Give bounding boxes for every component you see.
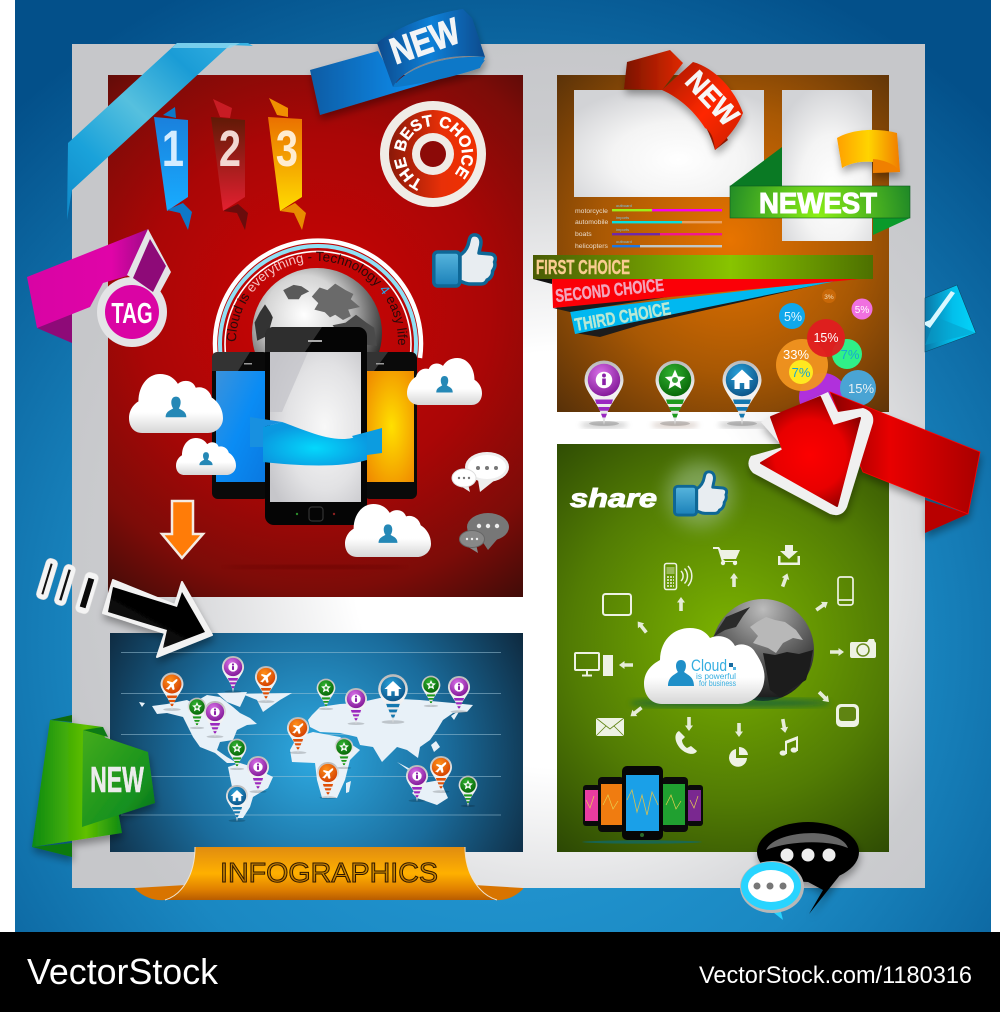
percentage bubbles: 5%	[784, 310, 802, 324]
icon: envelope	[596, 718, 624, 736]
central cloud with text: Cloud	[691, 657, 727, 675]
red arrow sticker	[748, 392, 980, 533]
bar chart	[575, 203, 722, 250]
first choice: FIRST CHOICE	[536, 257, 630, 279]
number ribbon 3	[268, 98, 306, 230]
second choice: SECOND CHOICE	[554, 275, 665, 306]
INFOGRAPHICS banner: INFOGRAPHICS	[220, 857, 438, 888]
orange curl	[837, 130, 900, 173]
percentage bubbles: 15%	[813, 331, 839, 345]
speech bubbles gray	[460, 513, 509, 553]
icon: download	[778, 545, 800, 565]
arrow ribbon	[830, 392, 980, 533]
left phone	[212, 352, 269, 499]
icon: pie chart	[729, 747, 748, 767]
blank paper card left	[574, 90, 764, 197]
right phone	[364, 352, 417, 499]
percentage bubbles	[776, 289, 876, 421]
central cloud with text: for business	[699, 679, 736, 688]
bar chart: boats	[575, 231, 592, 238]
number ribbon 2: 2	[219, 120, 241, 177]
orange down arrow	[162, 501, 203, 558]
green NEW ribbon: NEW	[90, 761, 144, 800]
icon: cart	[713, 547, 740, 565]
blue corner ribbon	[67, 43, 253, 220]
bar chart: imports	[616, 227, 629, 232]
green NEWEST banner: NEWEST	[759, 188, 877, 220]
INFOGRAPHICS banner	[135, 847, 523, 900]
percentage bubbles: 7%	[841, 347, 860, 362]
globe with text ring: Cloud is everything - Technology 4 easy life	[226, 252, 408, 345]
bar chart: outboard	[616, 203, 632, 208]
bar chart: automobile	[575, 219, 608, 226]
black arrow sticker	[103, 580, 212, 657]
green NEW ribbon	[32, 715, 155, 857]
blank paper card right	[782, 90, 872, 241]
thumbs up with glow	[667, 461, 733, 527]
slash marks sticker	[35, 557, 100, 615]
blue NEW ribbon: NEW	[385, 10, 465, 73]
red NEW ribbon: NEW	[679, 64, 746, 133]
thumbs up icon	[434, 235, 495, 286]
panel: red cloud panel	[108, 75, 523, 597]
best choice badge	[380, 101, 486, 207]
number ribbon 2	[211, 99, 248, 230]
map pins	[161, 656, 477, 822]
percentage bubbles: 33%	[783, 347, 809, 362]
footer image id: VectorStock.com/1180316	[699, 962, 972, 989]
percentage bubbles: 7%	[792, 365, 811, 380]
cloud 3	[407, 358, 482, 405]
world map	[139, 692, 473, 818]
central cloud with text	[630, 628, 830, 708]
icon: telephone handset	[675, 731, 697, 754]
pin: star	[651, 360, 699, 428]
footer brand: VectorStock	[27, 951, 219, 992]
third choice: THIRD CHOICE	[573, 298, 672, 335]
first choice	[533, 255, 873, 284]
icon: music note	[780, 736, 798, 756]
panel: orange chart panel	[557, 75, 889, 421]
paper frame	[72, 44, 925, 888]
panel: green share panel	[557, 444, 889, 852]
cloud user icon	[668, 660, 694, 686]
magenta TAG sticker	[27, 229, 171, 347]
number ribbon 1	[154, 107, 192, 230]
speech bubbles white	[452, 452, 509, 492]
central cloud with text: is powerful	[696, 671, 736, 681]
magenta TAG sticker: TAG	[111, 298, 153, 330]
number ribbon 1: 1	[162, 120, 184, 177]
red NEW ribbon	[624, 50, 746, 150]
cyan speech bubble	[740, 861, 804, 920]
share heading: share	[570, 483, 657, 513]
percentage bubbles: 5%	[855, 305, 869, 316]
center phone	[265, 327, 367, 525]
cloud 2	[176, 438, 236, 475]
footer bar	[0, 932, 1000, 1012]
bar chart: outboard	[616, 239, 632, 244]
cloud 1	[129, 374, 223, 433]
icon: mobile phone	[664, 564, 692, 590]
icon: desktop computer	[575, 653, 613, 676]
cloud 4	[345, 504, 431, 557]
bar chart: motorcycle	[575, 208, 608, 215]
percentage bubbles: 3%	[824, 294, 834, 301]
icon: tablet	[603, 594, 631, 615]
pin: info	[580, 360, 628, 428]
best choice badge: THE BEST CHOICE	[394, 114, 474, 191]
choice ribbons	[533, 255, 873, 337]
icon: camera	[850, 639, 876, 658]
green NEWEST banner	[730, 130, 910, 235]
blue NEW ribbon	[310, 9, 485, 115]
number ribbon 3: 3	[276, 120, 298, 177]
icon: television	[836, 704, 859, 727]
panel: world map panel	[110, 633, 523, 852]
icon: smartphone	[838, 577, 853, 605]
small phones with charts	[582, 766, 703, 844]
black speech bubble	[757, 822, 859, 914]
pin: home	[718, 360, 766, 428]
second choice	[552, 275, 860, 312]
percentage bubbles: 15%	[848, 381, 874, 396]
bar chart: helicopters	[575, 243, 608, 250]
blue wavy banner	[250, 417, 382, 466]
third choice	[570, 279, 846, 337]
envelope icon	[925, 285, 976, 352]
bar chart: imports	[616, 215, 629, 220]
globe	[712, 599, 814, 701]
radial arrows	[619, 572, 844, 737]
